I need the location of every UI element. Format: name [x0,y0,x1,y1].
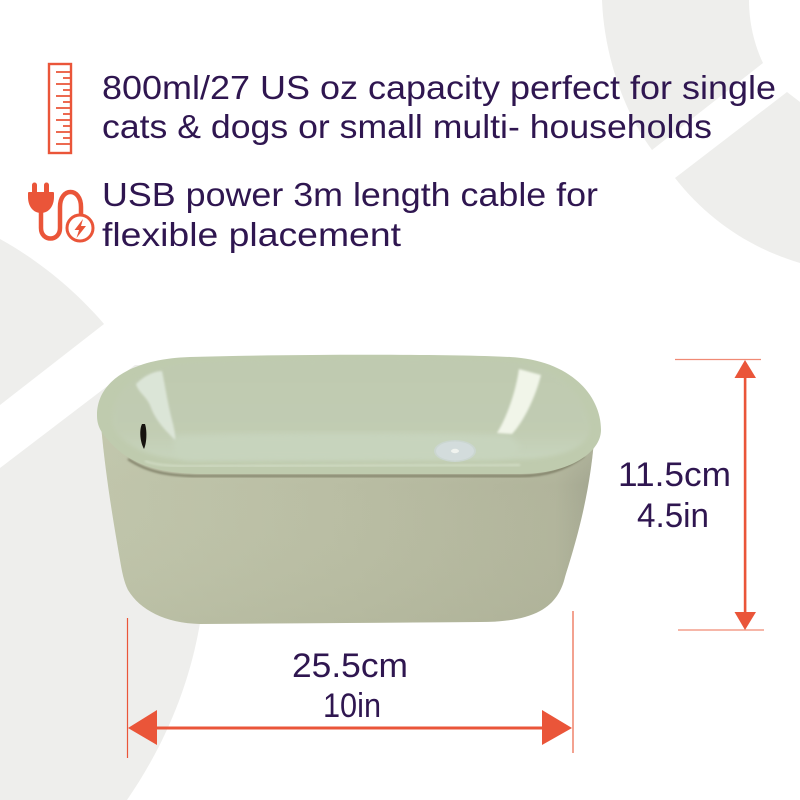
width label [292,647,408,725]
right glare [497,369,541,434]
text: USB power: flexible placement [102,216,401,253]
silicone drain [434,440,476,462]
shadow under lid [128,456,584,476]
product: fountain bowl [97,355,601,624]
height label: 4.5in [637,497,709,535]
rim highlight [145,461,520,466]
height dimension: arrow [675,360,764,630]
height label [618,456,731,535]
water outlet [140,424,146,449]
text: capacity [102,69,776,145]
inner basin [112,359,590,460]
icon: ruler [49,64,71,153]
text: USB power [102,176,598,253]
text: USB power: USB power 3m length cable for [102,176,598,213]
lid rim [97,355,601,474]
width dimension: arrow [128,611,573,758]
height label: 11.5cm [618,456,731,494]
width label: 10in [323,687,381,725]
bowl body [101,425,595,624]
left glare [136,371,175,440]
text: capacity: cats & dogs or small multi- households [102,108,712,145]
width label: 25.5cm [292,647,408,685]
text: capacity: 800ml/27 US oz capacity perfect for single [102,69,776,106]
icon: plug and USB cable [28,182,93,241]
basin floor [173,433,520,460]
